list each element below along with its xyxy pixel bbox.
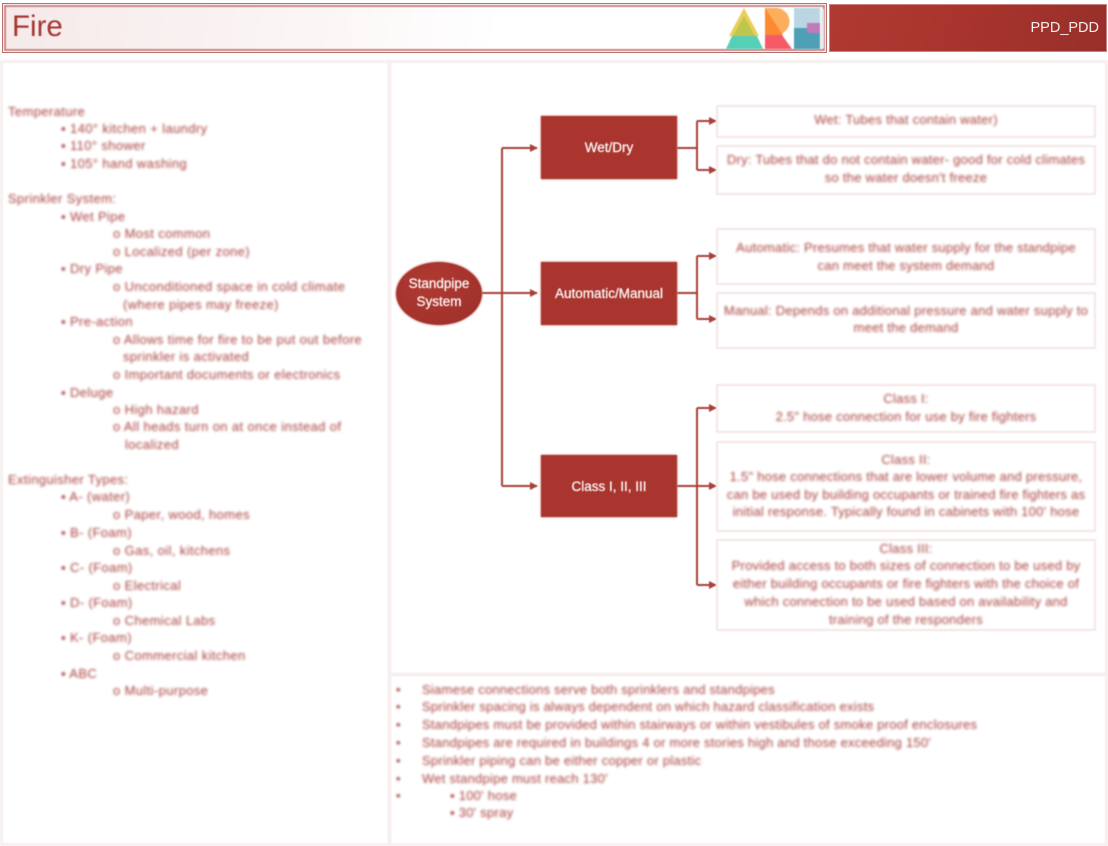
node: Standpipe System: System — [416, 294, 462, 308]
text block: standpipe descriptions: meet the demand — [854, 320, 958, 335]
text block: standpipe descriptions: Dry: Tubes that do not contain water- good for cold climates — [727, 152, 1085, 167]
text block: sprinkler system: o Most common — [113, 226, 210, 241]
node: Class I, II, III: Class I, II, III — [571, 478, 646, 494]
text block: extinguisher types: o Paper, wood, homes — [113, 507, 250, 522]
header label bar: PPD_PDD — [829, 4, 1107, 52]
node: Standpipe System — [396, 262, 482, 325]
box: class II — [716, 441, 1096, 532]
text block: standpipe descriptions: Provided access to both sizes of connection to be used by — [732, 558, 1080, 573]
text block: extinguisher types: Extinguisher Types: — [8, 472, 128, 487]
text block: extinguisher types: o Chemical Labs — [113, 613, 216, 628]
title: Fire: Fire — [12, 10, 63, 43]
text block: extinguisher types: o Gas, oil, kitchens — [113, 543, 230, 558]
text block: temperature: ▪ 110° shower — [61, 138, 146, 153]
text block: sprinkler system: Sprinkler System: — [8, 191, 116, 206]
text block: bottom notes: • — [396, 771, 401, 786]
box: manual — [716, 292, 1096, 349]
text block: temperature — [7, 104, 208, 172]
text block: standpipe descriptions: Automatic: Presumes that water supply for the standpipe — [736, 240, 1076, 255]
text block: bottom notes — [395, 682, 978, 821]
box: class I — [716, 384, 1096, 433]
text block: standpipe descriptions: can meet the system demand — [817, 258, 995, 273]
text block: standpipe descriptions: 1.5" hose connections that are lower volume and pressure, — [730, 469, 1082, 484]
text block: bottom notes: • — [396, 735, 401, 750]
text block: standpipe descriptions: either building occupants or fire fighters with the choice of — [733, 576, 1079, 591]
text block: extinguisher types: o Multi-purpose — [113, 683, 208, 698]
text block: sprinkler system — [7, 191, 362, 452]
text block: bottom notes: Sprinkler spacing is always dependent on which hazard classification exists — [422, 699, 874, 714]
panel: standpipe diagram frame — [388, 60, 1108, 676]
text block: standpipe descriptions: so the water doesn't freeze — [825, 170, 987, 185]
text block: bottom notes: ▪ 100' hose — [450, 788, 517, 803]
text block: extinguisher types: ▪ ABC — [61, 666, 97, 681]
text block: sprinkler system: o Unconditioned space in cold climate — [113, 279, 345, 294]
text block: extinguisher types: o Electrical — [113, 578, 181, 593]
text block: extinguisher types — [7, 472, 251, 699]
text block: bottom notes: • — [396, 699, 401, 714]
text block: sprinkler system: o Localized (per zone) — [113, 244, 250, 259]
box: dry — [716, 145, 1096, 195]
text block: standpipe descriptions — [723, 112, 1090, 628]
text block: sprinkler system: ▪ Dry Pipe — [61, 261, 123, 276]
node: Automatic/Manual — [541, 262, 677, 325]
text block: sprinkler system: o Allows time for fire to be put out before — [113, 332, 362, 347]
text block: sprinkler system: ▪ Wet Pipe — [61, 209, 126, 224]
header label bar: PPD_PDD: PPD_PDD — [1030, 20, 1099, 36]
text block: temperature: ▪ 105° hand washing — [61, 156, 187, 171]
text block: extinguisher types: ▪ A- (water) — [61, 489, 130, 504]
text block: sprinkler system: o Important documents or electronics — [113, 367, 341, 382]
text block: bottom notes: Siamese connections serve both sprinklers and standpipes — [422, 682, 775, 697]
text block: sprinkler system: o High hazard — [113, 402, 199, 417]
text block: standpipe descriptions: can be used by building occupants or trained fire fighters as — [727, 487, 1085, 502]
text block: bottom notes: • — [396, 753, 401, 768]
text block: sprinkler system: o All heads turn on at once instead of — [113, 419, 341, 434]
text block: bottom notes: • — [396, 717, 401, 732]
box: automatic — [716, 228, 1096, 285]
node: Class I, II, III — [541, 455, 677, 517]
text block: standpipe descriptions: Class I: — [883, 391, 929, 406]
text block: standpipe descriptions: Wet: Tubes that contain water) — [814, 112, 998, 127]
text block: sprinkler system: localized — [125, 437, 179, 452]
text block: extinguisher types: ▪ D- (Foam) — [61, 595, 133, 610]
node: Automatic/Manual: Automatic/Manual — [555, 286, 663, 301]
text block: standpipe descriptions: initial response. Typically found in cabinets with 100' hose — [733, 504, 1079, 519]
text block: extinguisher types: o Commercial kitchen — [113, 648, 246, 663]
box: wet — [716, 105, 1096, 138]
text block: bottom notes: • — [396, 682, 401, 697]
text block: extinguisher types: ▪ B- (Foam) — [61, 525, 132, 540]
box: class III — [716, 539, 1096, 631]
text block: sprinkler system: ▪ Pre-action — [61, 314, 133, 329]
text block: extinguisher types: ▪ K- (Foam) — [61, 630, 132, 645]
text block: standpipe descriptions: 2.5" hose connection for use by fire fighters — [776, 409, 1036, 424]
text block: bottom notes: Standpipes are required in buildings 4 or more stories high and those exceeding 150' — [422, 735, 931, 750]
header title bar — [2, 3, 827, 53]
text block: bottom notes: Sprinkler piping can be either copper or plastic — [422, 753, 701, 768]
text block: bottom notes: • — [396, 788, 401, 803]
text block: standpipe descriptions: Class II: — [881, 452, 931, 467]
text block: sprinkler system: ▪ Deluge — [61, 385, 113, 400]
title: Fire — [4, 5, 825, 51]
text block: bottom notes: Wet standpipe must reach 130' — [422, 771, 608, 786]
node: Wet/Dry: Wet/Dry — [585, 140, 633, 155]
panel: bottom notes frame — [388, 673, 1108, 846]
text block: standpipe descriptions: which connection to be used based on availability and — [744, 594, 1068, 609]
text block: standpipe descriptions: Manual: Depends on additional pressure and water supply to — [724, 303, 1088, 318]
text block: extinguisher types: ▪ C- (Foam) — [61, 560, 133, 575]
text block: standpipe descriptions: Class III: — [879, 541, 933, 556]
text block: standpipe descriptions: training of the responders — [829, 612, 983, 627]
text block: sprinkler system: (where pipes may freeze) — [123, 297, 279, 312]
text block: temperature: Temperature — [8, 104, 85, 119]
panel: left notes frame — [0, 60, 391, 846]
node: Wet/Dry — [541, 116, 677, 179]
node: Standpipe System: Standpipe — [409, 276, 469, 290]
text block: bottom notes: Standpipes must be provided within stairways or within vestibules of smoke proof enclosures — [422, 717, 977, 732]
icon: ARE logo — [726, 7, 824, 50]
text block: bottom notes: ▪ 30' spray — [450, 805, 513, 820]
text block: temperature: ▪ 140° kitchen + laundry — [61, 121, 207, 136]
text block: sprinkler system: sprinkler is activated — [123, 349, 249, 364]
